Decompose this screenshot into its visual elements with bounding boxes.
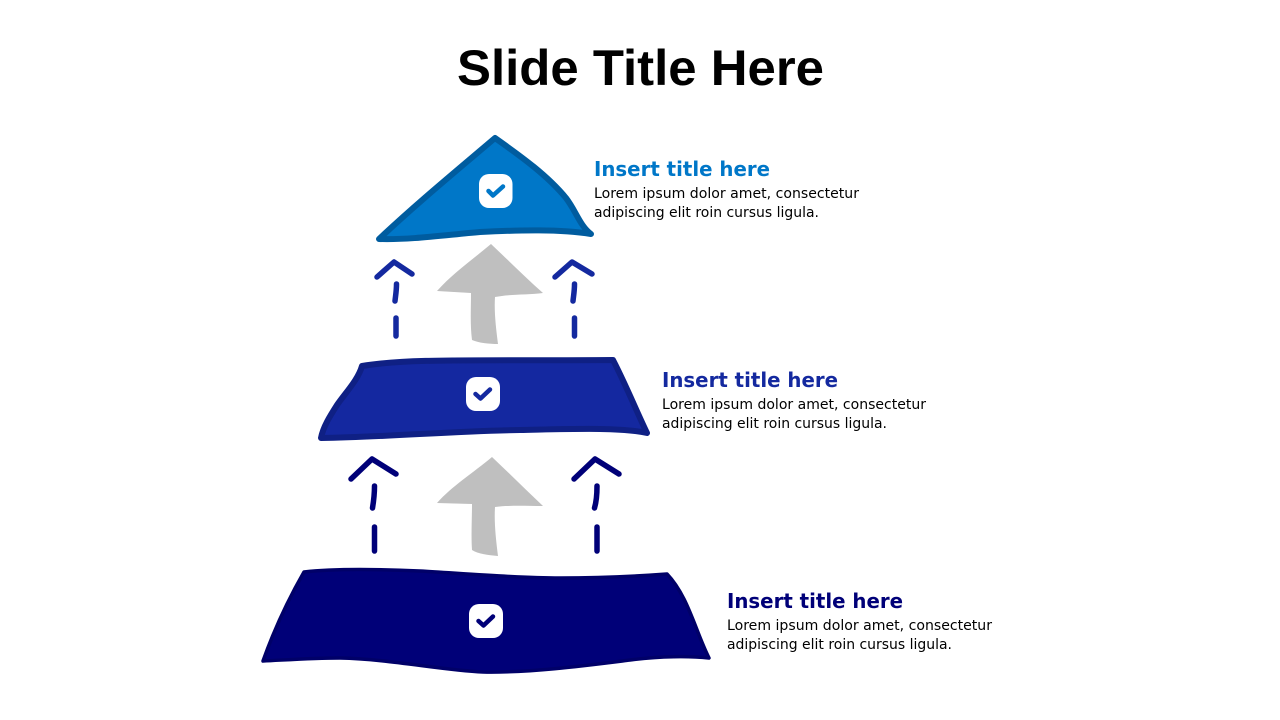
panel: top pyramid tier — [379, 138, 591, 239]
text block: bottom tier — [727, 589, 992, 653]
panel: middle pyramid tier — [321, 360, 647, 438]
icon: checkmark bottom — [469, 604, 503, 638]
text block: top tier: Insert title here — [594, 157, 770, 181]
shape: middle trapezoid — [321, 360, 647, 438]
text block: middle tier: Insert title here — [662, 368, 838, 392]
title: Slide Title Here — [457, 40, 824, 96]
shape: top triangle — [379, 138, 591, 239]
text block: top tier — [594, 157, 859, 221]
text block: top tier: adipiscing elit roin cursus ligula. — [594, 204, 819, 221]
text block: middle tier: Lorem ipsum dolor amet, consectetur — [662, 396, 926, 413]
text block: bottom tier: Insert title here — [727, 589, 903, 613]
arrow: lower grey arrow — [437, 457, 543, 556]
text block: bottom tier: adipiscing elit roin cursus ligula. — [727, 636, 952, 653]
panel: bottom pyramid tier — [263, 570, 709, 672]
arrow: lower right dashed arrow — [574, 459, 619, 551]
text block: middle tier: adipiscing elit roin cursus ligula. — [662, 415, 887, 432]
arrow: upper grey arrow — [437, 244, 543, 344]
text block: top tier: Lorem ipsum dolor amet, consectetur — [594, 185, 859, 202]
icon: checkmark top — [479, 174, 512, 208]
arrow: upper left dashed arrow — [377, 262, 412, 336]
shape: bottom trapezoid — [263, 570, 709, 672]
text block: middle tier — [662, 368, 926, 432]
icon: checkmark middle — [466, 377, 500, 411]
arrow: upper right dashed arrow — [555, 262, 592, 336]
text block: bottom tier: Lorem ipsum dolor amet, consectetur — [727, 617, 992, 634]
arrow: lower left dashed arrow — [351, 459, 396, 551]
